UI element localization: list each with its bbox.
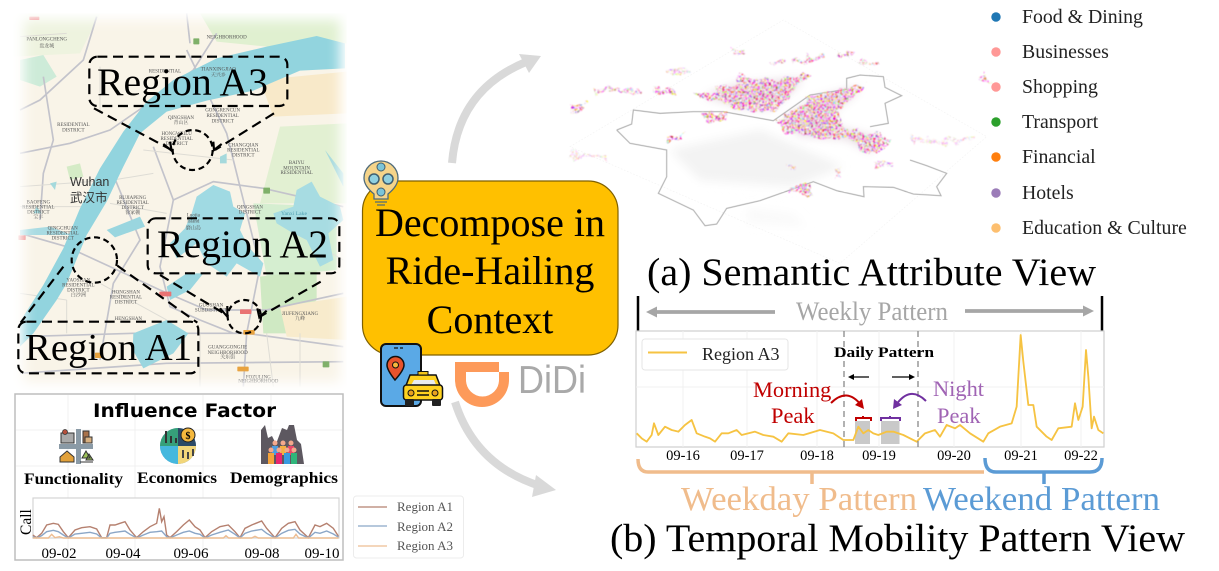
label: Region A3: Region A3: [97, 61, 268, 104]
map of Wuhan: HONGWEILU: [161, 132, 192, 137]
map of Wuhan: RESIDENTIAL: [62, 284, 95, 289]
map of Wuhan: DISTRICT: [121, 206, 144, 211]
legend: semantic categories: Transport: [1022, 111, 1099, 133]
x-axis dates: 09-22: [1064, 448, 1098, 464]
map of Wuhan: RESIDENTIAL: [57, 123, 90, 128]
night peak annotation: Night: [933, 376, 985, 401]
label: Wuhan: Wuhan: [70, 175, 109, 189]
map of Wuhan: 宝丰: [33, 213, 43, 220]
map of Wuhan: DISTRICT: [115, 300, 137, 305]
legend: semantic categories: Education & Culture: [1022, 217, 1187, 239]
map of Wuhan: QINGSHAN: [237, 205, 263, 210]
map of Wuhan: GONGRENCUN: [205, 109, 241, 114]
map of Wuhan: CHANGQIAN: [228, 144, 259, 149]
legend: semantic categories: Hotels: [1022, 182, 1074, 204]
panel: influence factor: [15, 394, 343, 562]
label: Wuhan: [70, 175, 109, 205]
icon: phone and taxi: [381, 344, 442, 406]
panel: decompose in ride-hailing context: Ride-Hailing: [386, 248, 594, 293]
x-axis dates: 09-16: [666, 448, 700, 464]
arrow: to semantic view: [452, 54, 541, 163]
icon: economics: $: [186, 431, 190, 442]
night peak annotation: [881, 376, 985, 428]
map of Wuhan: RESIDENTIAL: [110, 295, 142, 300]
weekly pattern span: [638, 296, 1102, 331]
map of Wuhan: GUANGGONGJIE: [208, 346, 247, 351]
icon: economics: [160, 428, 196, 464]
map of Wuhan: 天兴乡: [211, 72, 226, 79]
map of Wuhan: NEIGHBORHOOD: [208, 351, 248, 356]
brace: weekday: [638, 459, 984, 484]
panel: decompose in ride-hailing context: [362, 181, 618, 355]
map of Wuhan: RESIDENTIAL: [160, 137, 193, 142]
map of Wuhan: RESIDENTIAL: [46, 231, 79, 236]
map of Wuhan: NEIGHBORHOOD: [207, 35, 247, 40]
axis dates: 09-06: [174, 546, 209, 562]
map of Wuhan: 青山区: [174, 119, 188, 126]
map: semantic attribute points: [570, 20, 990, 263]
map of Wuhan: QINGCHUAN: [48, 226, 78, 231]
brace: weekend: [985, 458, 1102, 484]
map of Wuhan: FOZULING: [246, 375, 271, 380]
map of Wuhan: NEIGHBORHOOD: [238, 380, 279, 385]
label: Region A1: Region A1: [25, 327, 192, 369]
map of Wuhan: RESIDENTIAL: [280, 171, 313, 176]
x-axis dates: [666, 448, 1098, 464]
label: economics: Economics: [137, 470, 217, 487]
series line: [637, 335, 1103, 442]
x-axis dates: 09-20: [937, 448, 971, 464]
map of Wuhan: RUJIAPENG: [119, 196, 147, 201]
map of Wuhan: 九峰: [295, 315, 305, 322]
map of Wuhan: 徐家棚: [125, 209, 140, 216]
map of Wuhan: DISTRICT: [165, 142, 188, 147]
heading: semantic attribute view: (a) Semantic Attribute View: [647, 250, 1096, 294]
map of Wuhan: 盘龙城: [39, 43, 54, 50]
legend: semantic categories: Financial: [1022, 146, 1096, 168]
icon: functionality: [59, 429, 93, 464]
logo: DiDi: [455, 359, 586, 407]
x-axis dates: 09-21: [1004, 448, 1038, 464]
map of Wuhan: PANLONGCHENG: [26, 38, 67, 43]
legend: semantic categories: Shopping: [1022, 76, 1098, 98]
x-axis dates: 09-19: [862, 448, 896, 464]
map of Wuhan: RESIDENTIAL: [206, 114, 239, 119]
line chart: region A3 weekly: [636, 331, 1104, 464]
map of Wuhan: DISTRICT: [211, 119, 234, 124]
map of Wuhan: Yanxi Lake: [281, 211, 307, 217]
map of Wuhan: HENGSHAN: [115, 317, 142, 322]
legend: regions: Region A3: [397, 538, 453, 553]
heading: influence factor: Influence Factor: [93, 400, 277, 422]
map of Wuhan: DISTRICT: [62, 129, 85, 134]
morning peak annotation: Morning: [753, 377, 831, 402]
map of Wuhan: DISTRICT: [232, 154, 255, 159]
map of Wuhan: [13, 13, 347, 390]
map of Wuhan: QINGSHAN: [168, 116, 194, 121]
label: weekend pattern: Weekend Pattern: [923, 481, 1160, 518]
axis dates: 09-10: [304, 546, 340, 562]
map of Wuhan: RESIDENTIAL: [22, 205, 55, 210]
logo: DiDi: DiDi: [518, 359, 586, 402]
inner legend: [642, 339, 788, 370]
map of Wuhan: 关东街: [220, 354, 235, 361]
map of Wuhan: GUOSHAN: [199, 304, 224, 309]
highlighted peak windows: [855, 421, 900, 444]
map of Wuhan: BAOFENG: [27, 200, 50, 205]
daily pattern window: Daily Pattern: [834, 345, 935, 361]
label: Wuhan: 武汉市: [70, 190, 108, 205]
map of Wuhan: 白沙洲: [71, 292, 86, 299]
legend: regions: Region A2: [397, 519, 453, 534]
map of Wuhan: DISTRICT: [67, 289, 90, 294]
icon: demographics: [261, 425, 304, 464]
inner legend: Region A3: [702, 344, 780, 364]
legend: regions: [354, 496, 464, 558]
label: weekday pattern: Weekday Pattern: [681, 481, 917, 518]
map of Wuhan: 磨山岛: [186, 224, 201, 231]
map of Wuhan: YAOSHAN: [66, 279, 91, 284]
morning peak annotation: Peak: [771, 403, 815, 428]
map of Wuhan: Island: [187, 220, 200, 225]
daily pattern window: [834, 331, 935, 447]
map of Wuhan: TIANXINGJIAO: [201, 68, 236, 73]
map of Wuhan: JIUFENGXIANG: [282, 312, 319, 317]
line chart: call volume: [18, 498, 340, 562]
legend: regions: Region A1: [397, 499, 453, 514]
map of Wuhan: RESIDENTIAL: [227, 149, 260, 154]
map of Wuhan: DISTRICT: [27, 210, 50, 215]
legend: semantic categories: [991, 6, 1187, 239]
callouts: regions on map: [18, 57, 339, 373]
weekly pattern span: Weekly Pattern: [796, 297, 948, 326]
map of Wuhan: HONGSHAN: [112, 290, 140, 295]
axis dates: [42, 546, 340, 562]
map of Wuhan: DISTRICT: [51, 236, 74, 241]
heading: temporal mobility pattern view: (b) Temporal Mobility Pattern View: [610, 517, 1185, 560]
map of Wuhan: MOUNTAIN: [283, 166, 310, 171]
dashed regions and leader lines: [18, 57, 339, 373]
axis label: call: Call: [18, 509, 35, 535]
arrow: to temporal view: [455, 402, 556, 497]
map of Wuhan: DISTRICT: [239, 210, 261, 215]
panel: decompose in ride-hailing context: Decompose in: [375, 200, 605, 245]
map of Wuhan: Luojia: [187, 214, 201, 219]
map of Wuhan: RESIDENTIAL: [149, 70, 181, 75]
night peak annotation: Peak: [937, 403, 981, 428]
x-axis dates: 09-18: [800, 448, 834, 464]
axis dates: 09-04: [106, 546, 141, 562]
panel: decompose in ride-hailing context: Context: [427, 297, 553, 342]
axis dates: 09-02: [42, 546, 76, 562]
label: functionality: Functionality: [24, 471, 123, 488]
x-axis dates: 09-17: [730, 448, 764, 464]
map of Wuhan: RESIDENTIAL: [116, 201, 149, 206]
axis dates: 09-08: [244, 546, 280, 562]
legend: semantic categories: Businesses: [1022, 41, 1109, 63]
label: Region A2: Region A2: [157, 223, 328, 266]
legend: semantic categories: Food & Dining: [1022, 6, 1143, 28]
map of Wuhan: SUBDISTRICT: [195, 309, 227, 314]
label: demographics: Demographics: [230, 470, 338, 487]
icon: light bulb with gears: [364, 161, 398, 205]
map of Wuhan: BAIYU: [289, 161, 305, 166]
morning peak annotation: [753, 377, 871, 428]
